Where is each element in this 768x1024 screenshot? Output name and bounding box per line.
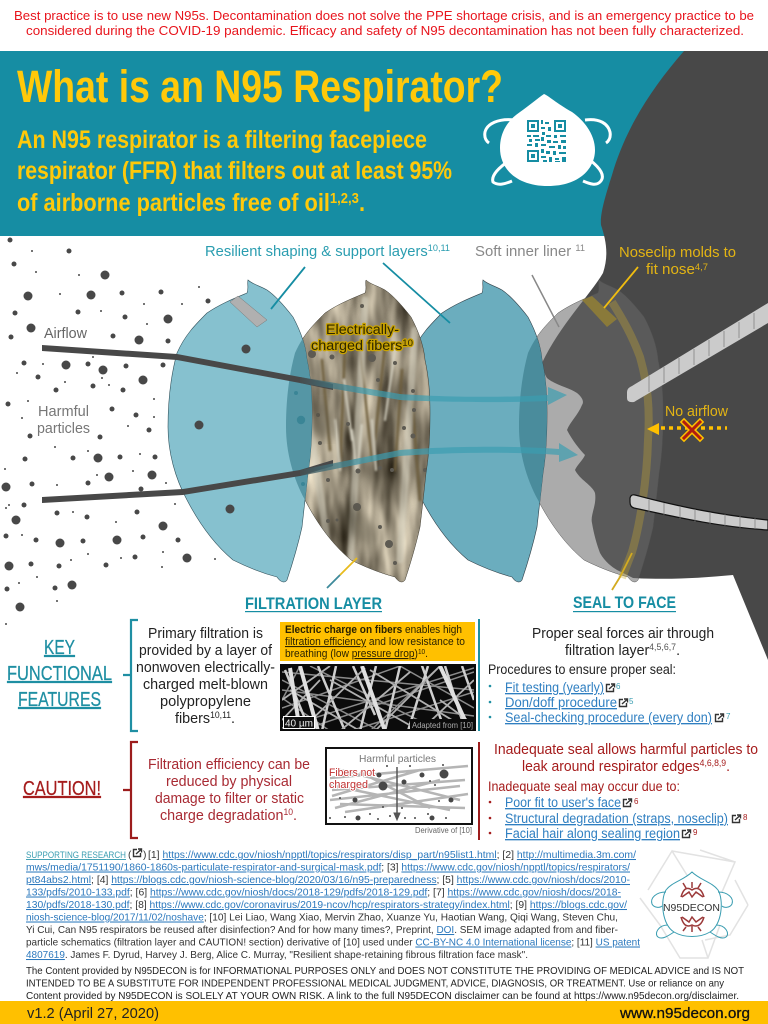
pointer to filtration layer — [340, 558, 357, 575]
label: soft inner liner — [475, 243, 585, 327]
seal band along respirator edge — [612, 302, 649, 578]
callout: electric charge: Electric charge on fibers enables high — [285, 624, 462, 636]
label: support layers — [205, 243, 450, 323]
label: airflow: Airflow — [44, 326, 88, 342]
list: seal failures: Structural degradation (straps, noseclip) — [505, 811, 728, 826]
list: seal failures: 9 — [693, 828, 698, 837]
text: primary filtration: provided by a layer of — [139, 642, 273, 659]
text: primary filtration — [136, 625, 275, 727]
label: support layers: Resilient shaping & support layers — [205, 244, 424, 260]
label: harmful particles: particles — [37, 421, 90, 437]
schematic: uncharged fibers: Fibers not — [329, 767, 375, 779]
label: harmful particles: Harmful — [38, 404, 89, 420]
divider teal — [478, 619, 480, 731]
list: seal failures: Facial hair along sealing region — [505, 826, 680, 841]
callout: electric charge: breathing (low pressure drop) — [285, 648, 420, 660]
text: filtration efficiency caution: . — [293, 807, 297, 824]
label: noseclip: fit nose — [646, 262, 693, 278]
footer bar — [0, 1001, 768, 1024]
noseclip front — [230, 296, 267, 327]
supporting research references: particle schematics (filtration layer and CAUTION! section) derivative of [10] used under CC-BY-NC 4.0 International license; [11] US patent — [26, 938, 640, 948]
disclaimer: Content provided by N95DECON is SOLELY AT YOUR OWN RISK. A link to the full N95DECON disclaimer can be found at https://www.n95decon.org/disclaimer. — [26, 990, 739, 1002]
supporting research references: ( — [128, 850, 132, 861]
label: support layers: 10,11 — [428, 243, 450, 253]
footer bar: www.n95decon.org — [619, 1005, 750, 1022]
label: harmful particles — [37, 404, 90, 437]
caption: derivative: Derivative of [10] — [415, 826, 472, 835]
text: filtration efficiency caution: Filtration efficiency can be — [148, 756, 310, 773]
text: proper seal — [532, 626, 714, 659]
callout: electric charge: . — [425, 648, 428, 660]
text: filtration efficiency caution: 10 — [283, 807, 293, 817]
text: filtration efficiency caution: charge degradation — [160, 807, 289, 824]
text: proper seal: Proper seal forces air through — [532, 626, 714, 642]
front support layer — [168, 280, 312, 582]
list: seal failures — [488, 779, 748, 841]
label: noseclip: 4,7 — [695, 262, 708, 272]
heading: filtration layer: FILTRATION LAYER — [245, 595, 382, 613]
subtitle definition: 1,2,3 — [330, 190, 359, 207]
warning notice — [14, 8, 754, 38]
label: soft inner liner: 11 — [575, 243, 585, 253]
text: inadequate seal: . — [726, 759, 730, 775]
filtration layer — [302, 280, 430, 582]
list: seal procedures: 6 — [616, 682, 621, 691]
head strap lower — [630, 495, 768, 530]
subtitle definition: . — [359, 189, 365, 217]
text: primary filtration: fibers — [175, 710, 212, 727]
label: electrically-charged fibers: charged fibers — [311, 338, 397, 353]
callout: electric charge: 10 — [418, 649, 425, 656]
header banner — [0, 51, 768, 236]
disclaimer — [26, 965, 745, 1002]
supporting research references: [1] https://www.cdc.gov/niosh/npptl/topics/respirators/disp_part/n95list1.html ; [2] http://multimedia.3m.com/ — [148, 850, 636, 861]
supporting research references: mws/media/1751190/1860-1860s-particulate-respirator-and-surgical-mask.pdf; [3] https://www.cdc.gov/niosh/npptl/topics/respirators/ — [26, 862, 630, 874]
heading: key functional features: KEY — [44, 637, 75, 659]
text: proper seal: filtration layer — [565, 643, 651, 659]
list: seal procedures: Fit testing (yearly) — [505, 680, 604, 695]
label: noseclip: Noseclip molds to — [619, 245, 736, 261]
supporting research references: 4807619. James F. Dyrud, Harvey J. Berg, Alice C. Murray, "Resilient shape-retaining fibrous filtration face mask". — [26, 950, 528, 961]
head strap upper — [627, 303, 768, 402]
head silhouette — [542, 51, 768, 660]
text: proper seal: . — [676, 643, 680, 659]
label: electrically-charged fibers — [311, 322, 413, 353]
list: seal procedures — [488, 662, 731, 725]
airflow arrow top — [42, 345, 567, 405]
micrograph of fibers — [280, 660, 476, 731]
supporting research references: pt84abs2.html; [4] https://blogs.cdc.gov/niosh-science-blog/2020/03/16/n95-preparedness; [5] https://www.cdc.gov/niosh/docs/2010- — [26, 875, 630, 886]
noseclip — [582, 296, 617, 327]
callout: electric charge — [280, 622, 475, 661]
subtitle definition: of airborne particles free of oil — [17, 189, 377, 217]
list: seal procedures: Seal-checking procedure (every don) — [505, 710, 712, 725]
divider red — [478, 742, 480, 840]
text: inadequate seal: Inadequate seal allows harmful particles to — [494, 742, 758, 758]
micrograph of fibers: Adapted from [10] — [412, 721, 473, 730]
text: primary filtration: Primary filtration is — [148, 625, 263, 642]
text: filtration efficiency caution: damage to filter or static — [155, 790, 304, 807]
text: filtration efficiency caution — [148, 756, 310, 824]
icon: QR code — [527, 120, 566, 162]
supporting research references: ) — [143, 850, 146, 861]
text: primary filtration: polypropylene — [160, 693, 251, 710]
title: What is an N95 Respirator? — [17, 61, 503, 112]
bracket: caution — [123, 742, 138, 838]
schematic: uncharged fibers: charged — [329, 779, 368, 791]
heading: caution: CAUTION! — [23, 778, 101, 800]
third support layer — [420, 280, 548, 582]
text: primary filtration: . — [231, 710, 235, 727]
pointer lower to filtration heading — [327, 575, 340, 588]
label: noseclip — [604, 245, 736, 308]
bracket: key features — [123, 620, 138, 731]
supporting research references: 130/pdfs/2018-130.pdf; [8] https://www.cdc.gov/coronavirus/2019-ncov/hcp/respirators-strategy/index.html; [9] https://blogs.cdc.gov/ — [26, 900, 627, 911]
no airflow indicator — [647, 404, 729, 438]
text: proper seal: 4,5,6,7 — [649, 642, 676, 652]
list: seal failures: 6 — [634, 797, 639, 806]
logo: N95DECON — [640, 850, 748, 958]
particles cloud — [2, 238, 216, 625]
heading: key functional features — [7, 637, 112, 711]
list: seal procedures: Procedures to ensure proper seal: — [488, 662, 676, 677]
footer bar: v1.2 (April 27, 2020) — [27, 1005, 159, 1022]
list: seal procedures: Don/doff procedure — [505, 695, 617, 710]
heading: key functional features: FEATURES — [18, 689, 101, 711]
schematic: uncharged fibers — [326, 748, 472, 824]
warning notice: considered during the COVID-19 pandemic. Efficacy and safety of N95 decontamination has not been fully characterized. — [26, 23, 744, 38]
airflow arrow bottom — [42, 443, 578, 503]
supporting research references: Yi Cui, Can N95 respirators be reused after disinfection? And for how many times?, Preprint, DOI. SEM image adapted from and fiber- — [26, 925, 618, 936]
text: primary filtration: nonwoven electrically- — [136, 659, 275, 676]
text: inadequate seal — [494, 742, 758, 775]
text: inadequate seal: leak around respirator edges — [522, 759, 707, 775]
heading: seal to face: SEAL TO FACE — [573, 594, 676, 612]
supporting research references: SUPPORTING RESEARCH — [26, 850, 126, 861]
text: inadequate seal: 4,6,8,9 — [700, 758, 726, 768]
icon: respirator with QR code — [485, 94, 610, 186]
list: seal failures: 8 — [743, 813, 748, 822]
supporting research references: 133/pdfs/2010-133.pdf; [6] https://www.cdc.gov/niosh/docs/2018-129/pdfs/2018-129.pdf; [7] https://www.cdc.gov/niosh/docs/2018- — [26, 888, 621, 898]
list: seal failures: Poor fit to user's face — [505, 795, 621, 810]
label: soft inner liner: Soft inner liner — [475, 244, 568, 260]
no airflow indicator: No airflow — [665, 404, 729, 420]
text: filtration efficiency caution: reduced by physical — [166, 773, 292, 790]
schematic: uncharged fibers: Harmful particles — [359, 753, 436, 765]
list: seal procedures: 7 — [726, 712, 731, 721]
pointer to seal heading — [612, 553, 632, 590]
logo: N95DECON: N95DECON — [663, 902, 720, 914]
supporting research references: niosh-science-blog/2017/11/02/noshave; [10] Lei Liao, Wang Xiao, Mervin Zhao, Xuanze Yu, Haotian Wang, Qiqi Wang, Steven Chu, — [26, 912, 618, 924]
inner liner layer — [519, 280, 663, 582]
text: primary filtration: charged melt-blown — [143, 676, 268, 693]
heading: key functional features: FUNCTIONAL — [7, 663, 112, 685]
subtitle definition: respirator (FFR) that filters out at least 95% — [17, 157, 452, 185]
label: electrically-charged fibers: Electrically- — [326, 322, 399, 337]
label: electrically-charged fibers: 10 — [402, 338, 413, 348]
list: seal failures: Inadequate seal may occur due to: — [488, 779, 680, 794]
micrograph of fibers: 40 µm — [285, 718, 313, 730]
list: seal procedures: 5 — [629, 697, 634, 706]
callout: electric charge: filtration efficiency and low resistance to — [285, 636, 465, 648]
subtitle definition: An N95 respirator is a filtering facepiece — [17, 126, 427, 154]
subtitle definition — [17, 126, 452, 217]
text: primary filtration: 10,11 — [210, 710, 231, 720]
warning notice: Best practice is to use new N95s. Decontamination does not solve the PPE shortage crisis, and is an emergency practice to be — [14, 8, 754, 23]
supporting research references — [26, 849, 640, 961]
